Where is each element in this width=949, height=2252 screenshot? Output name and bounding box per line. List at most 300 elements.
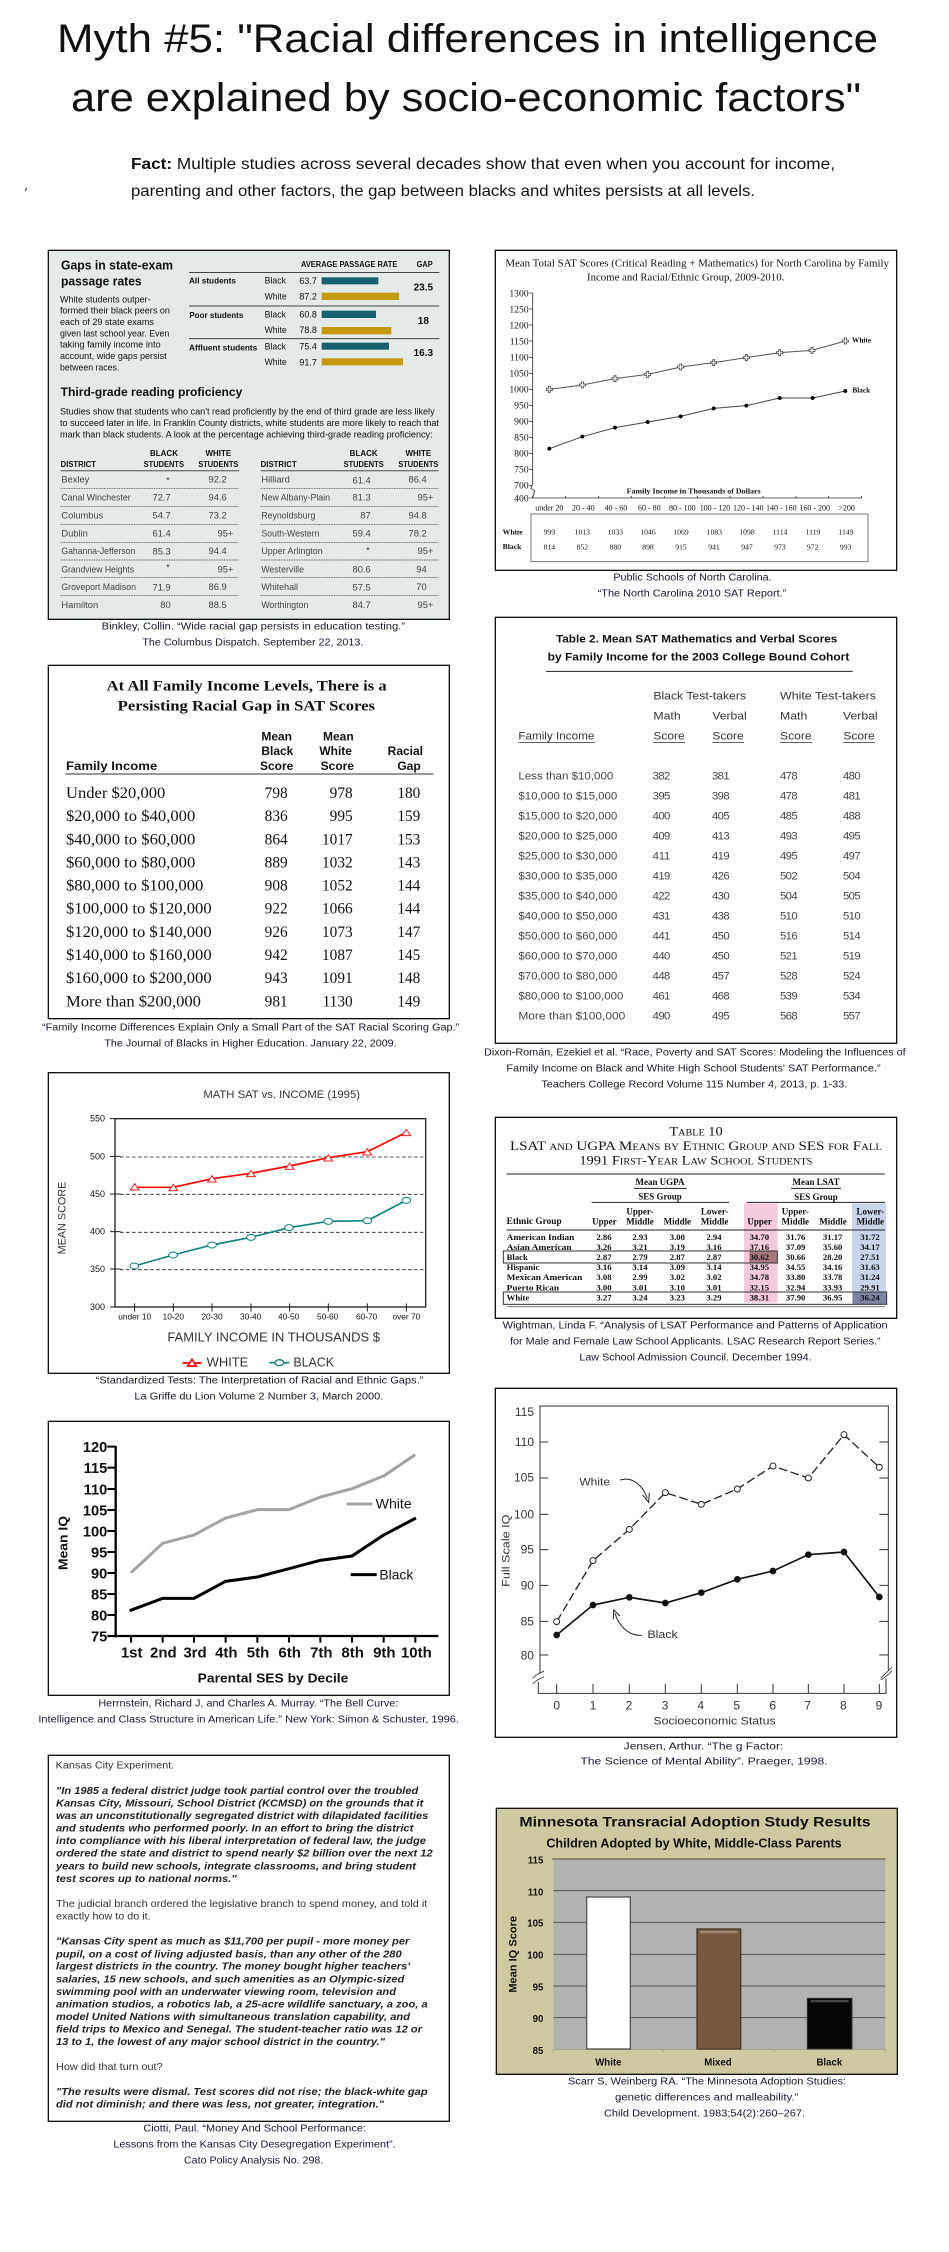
table: reading proficiency by district: 95+	[418, 493, 433, 503]
x axis labels: White	[595, 2058, 622, 2069]
fact text block: parenting and other factors, the gap between blacks and whites persists at all levels.	[131, 183, 755, 200]
table rows: 510	[843, 911, 861, 923]
table: reading proficiency by district: 86.9	[209, 582, 227, 592]
panel: North Carolina SAT line chart	[495, 250, 897, 599]
quote 1: "In 1985 a federal district judge took partial control over the troubled	[56, 1786, 419, 1797]
paragraph	[60, 406, 439, 439]
table: reading proficiency by district: 78.2	[409, 529, 427, 539]
caption: Jensen, Arthur. “The g Factor:	[624, 1741, 783, 1752]
caption: “The North Carolina 2010 SAT Report.”	[598, 588, 786, 599]
table rows: $60,000 to $70,000	[518, 951, 617, 963]
black line series	[130, 1518, 416, 1611]
caption: Wightman, Linda F. “Analysis of LSAT Performance and Patterns of Application	[503, 1321, 888, 1332]
axes: 110	[84, 1482, 107, 1498]
bar chart: passage rates: Black	[265, 309, 286, 319]
column headers: White	[319, 744, 352, 758]
bar chart: passage rates: Black	[265, 342, 286, 352]
y axis: 1050	[509, 369, 529, 380]
plot frame and axes	[90, 1114, 426, 1312]
x axis labels: 3	[662, 1698, 669, 1712]
y axis labels: 95	[533, 1982, 544, 1993]
x axis: 140 - 160	[766, 503, 797, 512]
table rows: 557	[843, 1011, 861, 1023]
intro text: account, wide gaps persist	[60, 351, 167, 361]
table: reading proficiency by district: 94.4	[209, 546, 227, 556]
table: reading proficiency by district: 54.7	[153, 511, 171, 521]
table rows: 480	[843, 771, 861, 783]
y axis	[509, 288, 535, 504]
table rows: 149	[397, 993, 421, 1010]
y axis: 1150	[510, 336, 529, 347]
panel: Jensen full scale IQ chart	[495, 1388, 897, 1767]
table rows	[507, 1232, 880, 1302]
x axis: 100 - 120	[700, 503, 730, 512]
x axis title: Socioeconomic Status	[653, 1715, 776, 1727]
caption: Cato Policy Analysis No. 298.	[184, 2156, 323, 2167]
table: reading proficiency by district: Hamilton	[61, 600, 98, 610]
intro text	[60, 294, 170, 372]
chart title: Income and Racial/Ethnic Group, 2009-2010.	[587, 272, 784, 283]
table rows: 3.01	[632, 1282, 648, 1292]
caption	[598, 572, 786, 599]
table rows: 31.17	[823, 1232, 843, 1242]
table rows	[66, 785, 421, 1010]
table: reading proficiency by district: Whitehall	[261, 582, 298, 592]
white line series	[554, 1432, 882, 1625]
table rows: $60,000 to $80,000	[66, 854, 196, 871]
data table: 1114	[773, 527, 788, 536]
table rows: 36.95	[823, 1292, 843, 1302]
x axis labels: 7th	[310, 1644, 333, 1661]
quote 2: model United Nations with simultaneous translation capability, and	[56, 2012, 411, 2023]
table rows: American Indian	[507, 1232, 575, 1242]
column headers: White Test-takers	[780, 691, 876, 703]
highlighted rows	[503, 1251, 887, 1307]
caption: “Family Income Differences Explain Only a Small Part of the SAT Racial Scoring Gap.”	[42, 1022, 459, 1033]
table rows: 3.16	[706, 1242, 722, 1252]
caption	[113, 2124, 396, 2167]
table rows: 419	[653, 871, 670, 883]
caption	[38, 1699, 459, 1726]
table rows: 31.76	[786, 1232, 806, 1242]
plot frame and axes: 350	[90, 1264, 105, 1274]
table: reading proficiency by district: Worthington	[261, 600, 308, 610]
table: reading proficiency by district: Gahanna-Jefferson	[61, 546, 135, 556]
table: reading proficiency by district: 61.4	[353, 475, 371, 485]
y axis: 1100	[510, 353, 529, 364]
table rows: 37.16	[750, 1242, 770, 1252]
quote 3: "The results were dismal. Test scores did not rise; the black-white gap	[56, 2087, 428, 2098]
column headers: Score	[321, 759, 354, 773]
table: reading proficiency by district: DISTRICT	[61, 460, 96, 469]
title: Myth #5: "Racial differences in intelligence	[57, 17, 878, 61]
panel frame	[495, 1117, 897, 1318]
plot frame	[538, 1406, 889, 1693]
table rows: 180	[397, 785, 421, 802]
quote 2: animation studios, a robotics lab, a 25-acre wildlife sanctuary, a zoo, a	[56, 1999, 428, 2010]
table rows: 438	[712, 911, 730, 923]
table: reading proficiency by district: 88.5	[209, 600, 227, 610]
table: reading proficiency by district: 85.3	[153, 547, 171, 557]
table: reading proficiency by district: 94.6	[209, 493, 227, 503]
column headers: Verbal	[843, 711, 878, 723]
column headers: Mean LSAT	[792, 1177, 840, 1187]
y axis: 900	[514, 417, 529, 428]
table rows: $80,000 to $100,000	[518, 991, 623, 1003]
chart title	[519, 1815, 871, 1850]
caption: Ciotti, Paul. “Money And School Performance:	[143, 2124, 366, 2135]
table rows: 461	[653, 991, 670, 1003]
table: reading proficiency by district	[61, 449, 439, 610]
table: reading proficiency by district: New Albany-Plain	[261, 493, 330, 503]
table rows: 3.08	[596, 1272, 612, 1282]
table rows: $50,000 to $60,000	[518, 931, 617, 943]
caption	[96, 1376, 423, 1402]
table heading: LSAT and UGPA Means by Ethnic Group and SES for Fall	[510, 1139, 882, 1153]
y axis: 1000	[509, 385, 529, 396]
black line series: Black	[852, 386, 871, 395]
x axis labels	[553, 1698, 883, 1712]
panel frame	[48, 1421, 449, 1695]
table rows: 34.17	[860, 1242, 880, 1252]
caption: Law School Admission Council. December 1994.	[579, 1353, 812, 1364]
column headers: Middle	[857, 1216, 884, 1226]
y axis: 950	[514, 401, 529, 412]
table rows: 995	[330, 808, 353, 825]
panel frame	[48, 665, 449, 1019]
commentary 1: The judicial branch ordered the legislative branch to spend money, and told it	[56, 1899, 427, 1910]
table: reading proficiency by district: 73.2	[209, 511, 227, 521]
table: reading proficiency by district: Grandview Heights	[61, 564, 134, 574]
table rows: 981	[265, 993, 288, 1010]
y axis title: Mean IQ Score	[508, 1916, 520, 1993]
heading: Kansas City Experiment.	[56, 1761, 174, 1772]
table rows: 400	[653, 811, 670, 823]
bar chart: passage rates: 16.3	[414, 348, 433, 359]
panel: state exam gaps	[48, 250, 449, 648]
table rows: 1091	[322, 970, 353, 987]
quote 1	[55, 1786, 433, 1885]
caption: Lessons from the Kansas City Desegregation Experiment”.	[113, 2140, 396, 2151]
table rows: $120,000 to $140,000	[66, 924, 212, 941]
x axis labels: 3rd	[183, 1644, 207, 1661]
table: reading proficiency by district: STUDENTS	[198, 460, 239, 469]
table rows: 488	[843, 811, 861, 823]
table: reading proficiency by district: 95+	[218, 564, 233, 574]
bar: black	[807, 1998, 852, 2049]
panel frame	[48, 250, 449, 619]
table rows: 448	[653, 971, 670, 983]
table rows: 3.14	[632, 1262, 648, 1272]
table rows: 34.70	[750, 1232, 769, 1242]
caption: “Standardized Tests: The Interpretation of Racial and Ethnic Gaps.”	[96, 1376, 423, 1387]
stray mark	[25, 188, 27, 191]
x axis labels: 1	[590, 1698, 597, 1712]
axes: 115	[84, 1461, 107, 1477]
table rows: More than $100,000	[518, 1011, 625, 1023]
table rows: $40,000 to $50,000	[518, 911, 617, 923]
table: reading proficiency by district: *	[166, 475, 170, 485]
y axis: 400	[514, 493, 529, 504]
table rows: 31.24	[860, 1272, 880, 1282]
paragraph: to succeed later in life. In Franklin County districts, white students are more likely to reach that	[60, 418, 439, 428]
bar chart: passage rates: Poor students	[189, 310, 244, 320]
panel frame	[48, 1755, 449, 2121]
column headers: Score	[653, 731, 685, 743]
chart title: Children Adopted by White, Middle-Class Parents	[546, 1836, 842, 1850]
table rows: 31.63	[860, 1262, 880, 1272]
column headers: Lower-	[701, 1206, 728, 1216]
intro text: each of 29 state exams	[60, 317, 154, 327]
table rows: $20,000 to $40,000	[66, 808, 196, 825]
table rows: 27.51	[860, 1252, 880, 1262]
table rows: 32.94	[786, 1282, 806, 1292]
x axis: 80 - 100	[669, 503, 696, 512]
panel: LSAT and UGPA table	[495, 1117, 897, 1364]
table rows: 1073	[322, 924, 353, 941]
panel frame	[495, 617, 897, 1043]
table rows: 942	[265, 947, 288, 964]
y axis: 700	[514, 481, 529, 492]
table heading: Table 2. Mean SAT Mathematics and Verbal Scores	[556, 634, 837, 646]
panel: Kansas City experiment text	[48, 1755, 449, 2167]
table rows: 495	[712, 1011, 730, 1023]
y axis labels: 110	[515, 1435, 534, 1449]
quote 1: and students who performed poorly. In an effort to bring the district	[56, 1824, 414, 1835]
data table: White	[503, 527, 523, 536]
column headers: Black Test-takers	[653, 691, 746, 703]
table rows: 1087	[322, 947, 353, 964]
y axis: 1200	[509, 320, 529, 331]
axes: 100	[83, 1524, 107, 1540]
plot frame and axes: 300	[90, 1302, 105, 1312]
table rows: 798	[265, 785, 288, 802]
table: reading proficiency by district: 95+	[218, 529, 233, 539]
table rows: 144	[397, 901, 421, 918]
table rows: 3.01	[706, 1282, 722, 1292]
table rows: $80,000 to $100,000	[66, 878, 204, 895]
table rows: Less than $10,000	[518, 771, 613, 783]
table rows: 2.79	[632, 1252, 648, 1262]
bar chart: passage rates: White	[265, 325, 287, 335]
quote 2: largest districts in the country. The money bought higher teachers'	[56, 1962, 411, 1973]
table rows: $30,000 to $35,000	[518, 871, 617, 883]
table: reading proficiency by district: WHITE	[205, 449, 232, 458]
caption: Child Development. 1983;54(2):260–267.	[604, 2109, 805, 2120]
y axis: 800	[514, 449, 529, 460]
y axis labels	[514, 1405, 534, 1662]
table rows: 478	[780, 791, 798, 803]
x axis labels	[595, 2058, 843, 2069]
table: reading proficiency by district: Upper Arlington	[261, 546, 323, 556]
plot area	[552, 1859, 885, 2052]
intro text: between races.	[60, 362, 119, 372]
caption: for Male and Female Law School Applicants. LSAC Research Report Series.”	[510, 1337, 881, 1348]
panel frame	[496, 1808, 897, 2074]
heading: gaps in state-exam passage rates: passage rates	[61, 275, 142, 289]
table rows: 33.78	[823, 1272, 843, 1282]
x axis labels: 6th	[278, 1644, 301, 1661]
column headers: Upper	[747, 1216, 772, 1226]
chart title	[505, 258, 890, 283]
caption: The Columbus Dispatch. September 22, 2013.	[142, 637, 363, 648]
table rows: 3.14	[706, 1262, 722, 1272]
bar chart: passage rates: White	[265, 291, 287, 301]
panel frame	[48, 1073, 449, 1373]
x axis labels: 20-30	[201, 1311, 223, 1321]
table heading: Table 10	[669, 1124, 723, 1138]
column headers: Middle	[782, 1216, 809, 1226]
caption: Scarr S, Weinberg RA. “The Minnesota Adoption Studies:	[568, 2077, 846, 2088]
y axis label: Mean IQ	[56, 1516, 71, 1570]
table rows: 889	[265, 854, 288, 871]
intro text: taking family income into	[60, 340, 161, 350]
table rows: 34.78	[750, 1272, 770, 1282]
table: reading proficiency by district: WHITE	[405, 449, 432, 458]
table: reading proficiency by district: 84.7	[353, 600, 371, 610]
table rows: 3.16	[596, 1262, 612, 1272]
quote 2: swimming pool with an underwater viewing room, television and	[56, 1987, 397, 1998]
table rows: 516	[780, 931, 798, 943]
column headers: Black	[261, 744, 294, 758]
table rows: 3.10	[670, 1282, 685, 1292]
bar chart: passage rates: 75.4	[299, 342, 317, 352]
table rows: 145	[397, 947, 421, 964]
legend: BLACK	[293, 1355, 334, 1370]
bar chart: passage rates: 60.8	[299, 310, 317, 320]
label: Black: Black	[647, 1629, 678, 1641]
table rows: 413	[712, 831, 730, 843]
caption	[42, 1022, 459, 1049]
y axis title: Full Scale IQ	[500, 1514, 512, 1587]
table rows: 34.16	[823, 1262, 843, 1272]
bar chart: passage rates	[189, 260, 439, 367]
table rows: 422	[653, 891, 670, 903]
y axis labels: 100	[527, 1950, 543, 1961]
x axis labels: 10-20	[163, 1311, 184, 1321]
quote 1: was an unconstitutionally segregated district with dilapidated facilities	[56, 1811, 429, 1822]
caption: Family Income on Black and White High School Students' SAT Performance.”	[506, 1064, 881, 1075]
table rows: 568	[780, 1011, 798, 1023]
table rows: 30.66	[786, 1252, 806, 1262]
caption: Dixon-Román, Ezekiel et al. “Race, Poverty and SAT Scores: Modeling the Influences of	[484, 1048, 906, 1059]
table rows: 159	[397, 808, 421, 825]
paragraph: mark than black students. A look at the percentage achieving third-grade reading proficiency:	[60, 429, 433, 439]
column headers: Upper-	[782, 1206, 809, 1216]
x axis: 60 - 80	[638, 503, 661, 512]
x axis labels: Black	[816, 2058, 843, 2069]
table rows: 3.27	[596, 1292, 612, 1302]
table: reading proficiency by district: Columbus	[61, 511, 104, 521]
white line series	[131, 1455, 415, 1573]
column headers: Family Income	[66, 759, 158, 773]
data table: 1083	[707, 527, 722, 536]
table rows: 3.24	[632, 1292, 648, 1302]
column headers: Middle	[701, 1216, 728, 1226]
x axis labels	[118, 1311, 421, 1321]
column headers: SES Group	[638, 1191, 682, 1201]
table rows: 534	[843, 991, 861, 1003]
black line series: Black	[379, 1566, 414, 1582]
table rows: 1017	[322, 831, 353, 848]
column headers: Upper	[592, 1216, 617, 1226]
data table: 1013	[575, 527, 590, 536]
table rows: 2.87	[706, 1252, 722, 1262]
table rows: 33.80	[786, 1272, 805, 1282]
table: reading proficiency by district: 95+	[418, 600, 433, 610]
table: reading proficiency by district: 72.7	[153, 493, 171, 503]
x axis labels: under 10	[118, 1311, 151, 1321]
x axis labels: 8th	[341, 1644, 364, 1661]
table rows: 30.62	[750, 1252, 769, 1262]
table: reading proficiency by district: Groveport Madison	[61, 582, 136, 592]
table rows: 34.95	[750, 1262, 770, 1272]
table rows: 29.91	[860, 1282, 880, 1292]
bar chart: passage rates: 23.5	[414, 283, 433, 294]
table heading: Persisting Racial Gap in SAT Scores	[118, 699, 375, 715]
plot frame and axes: 550	[90, 1114, 105, 1124]
column headers: Score	[843, 731, 875, 743]
x axis title: FAMILY INCOME IN THOUSANDS $	[167, 1330, 381, 1345]
table: reading proficiency by district: Canal Winchester	[61, 493, 131, 503]
data table: 1119	[806, 527, 821, 536]
table: reading proficiency by district: 80	[160, 600, 171, 610]
table rows: 505	[843, 891, 861, 903]
table rows: 3.09	[670, 1262, 686, 1272]
table rows: 1032	[322, 854, 353, 871]
table rows: 430	[712, 891, 730, 903]
table rows: 148	[397, 970, 421, 987]
bar chart: passage rates: 18	[418, 316, 429, 327]
column headers: Mean	[323, 729, 354, 743]
table rows: 395	[653, 791, 670, 803]
table rows: $10,000 to $15,000	[518, 791, 617, 803]
table rows: $40,000 to $60,000	[66, 831, 196, 848]
column headers	[507, 1174, 885, 1230]
table heading	[510, 1124, 882, 1168]
table rows: $20,000 to $25,000	[518, 831, 617, 843]
x axis labels: 9th	[373, 1644, 396, 1661]
table rows: 33.93	[823, 1282, 843, 1292]
table rows: 478	[780, 771, 798, 783]
y axis labels: 105	[527, 1919, 544, 1930]
column headers: Racial	[388, 744, 423, 758]
x axis: Family Income in Thousands of Dollars	[627, 487, 761, 495]
table rows: 450	[712, 951, 730, 963]
x axis labels: 8	[840, 1698, 847, 1712]
table rows: 468	[712, 991, 730, 1003]
table rows: 3.02	[706, 1272, 722, 1282]
x axis labels: 4th	[215, 1644, 238, 1661]
table rows: 153	[397, 831, 421, 848]
data table: 1098	[739, 527, 755, 536]
y axis: 1300	[509, 288, 529, 299]
x axis title: Parental SES by Decile	[198, 1670, 348, 1685]
x axis: under 20	[535, 503, 563, 512]
table rows: 502	[780, 871, 798, 883]
table: reading proficiency by district: STUDENTS	[344, 460, 384, 469]
table heading: 1991 First-Year Law School Students	[579, 1154, 812, 1168]
data table: 947	[741, 542, 753, 551]
x axis: 20 - 40	[572, 503, 595, 512]
table rows: $35,000 to $40,000	[518, 891, 617, 903]
x axis labels: 4	[697, 1698, 704, 1712]
table rows: 485	[780, 811, 798, 823]
bar chart: passage rates: 63.7	[299, 276, 317, 286]
table: reading proficiency by district: 94	[416, 564, 427, 574]
table: reading proficiency by district: *	[166, 563, 170, 573]
table rows: 3.00	[670, 1232, 685, 1242]
